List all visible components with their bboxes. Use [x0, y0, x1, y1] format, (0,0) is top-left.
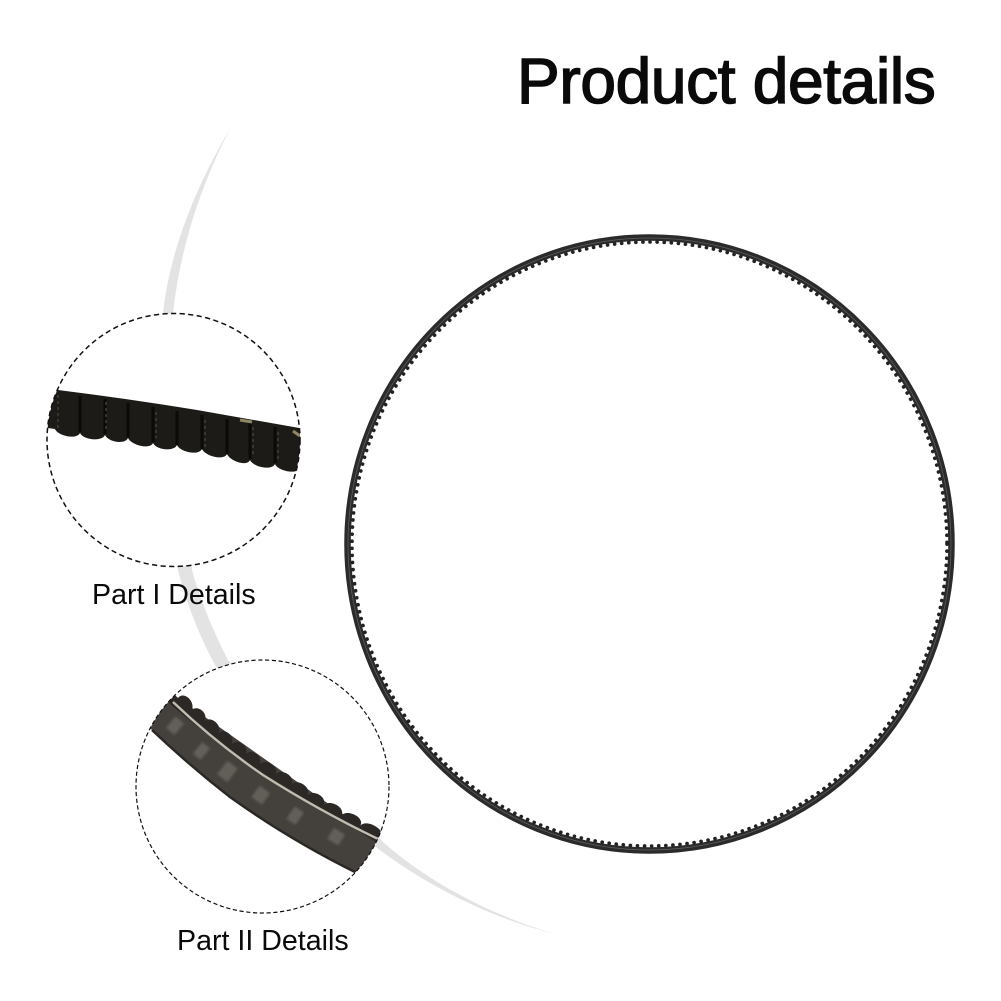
- detail circle: Part II: [130, 660, 395, 913]
- title: Product details: [517, 45, 935, 117]
- detail circle: Part I: [40, 314, 305, 566]
- belt product photo: [348, 238, 952, 850]
- decorative swoosh arc: [163, 127, 555, 934]
- belt close-up I: [40, 387, 305, 472]
- label: Part I Details: Part I Details: [92, 579, 256, 611]
- belt close-up II: [150, 696, 381, 873]
- label: Part II Details: Part II Details: [177, 925, 349, 957]
